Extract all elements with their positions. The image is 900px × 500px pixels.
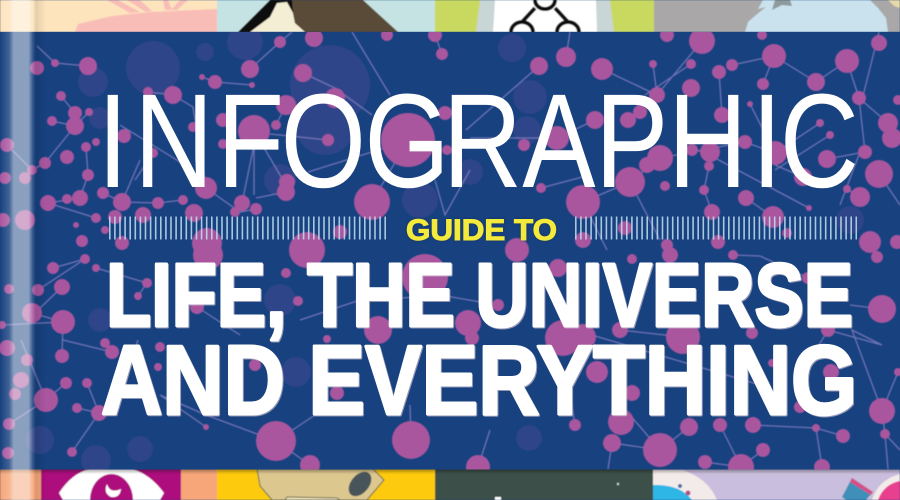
main title: INFOGRAPHIC: INFOGRAPHIC (97, 66, 859, 215)
tile: world map (654, 0, 900, 32)
tile: mountain (217, 0, 435, 32)
tile: dark green panel (435, 469, 653, 500)
tile: eye (0, 469, 217, 500)
barcode rule: left (109, 216, 389, 240)
bold title block (101, 246, 857, 435)
tile: molecule (435, 0, 654, 32)
subtitle: GUIDE TO: GUIDE TO (406, 214, 557, 247)
spine highlight (0, 0, 46, 500)
top strip of illustrated tiles (0, 0, 900, 32)
tile: sunrise (0, 0, 217, 32)
tile shadow (0, 469, 900, 474)
bottom strip of illustrated tiles (0, 467, 900, 500)
barcode rule: right (575, 216, 857, 240)
tile: lavender charts (653, 469, 900, 500)
tile: skull (217, 467, 435, 500)
